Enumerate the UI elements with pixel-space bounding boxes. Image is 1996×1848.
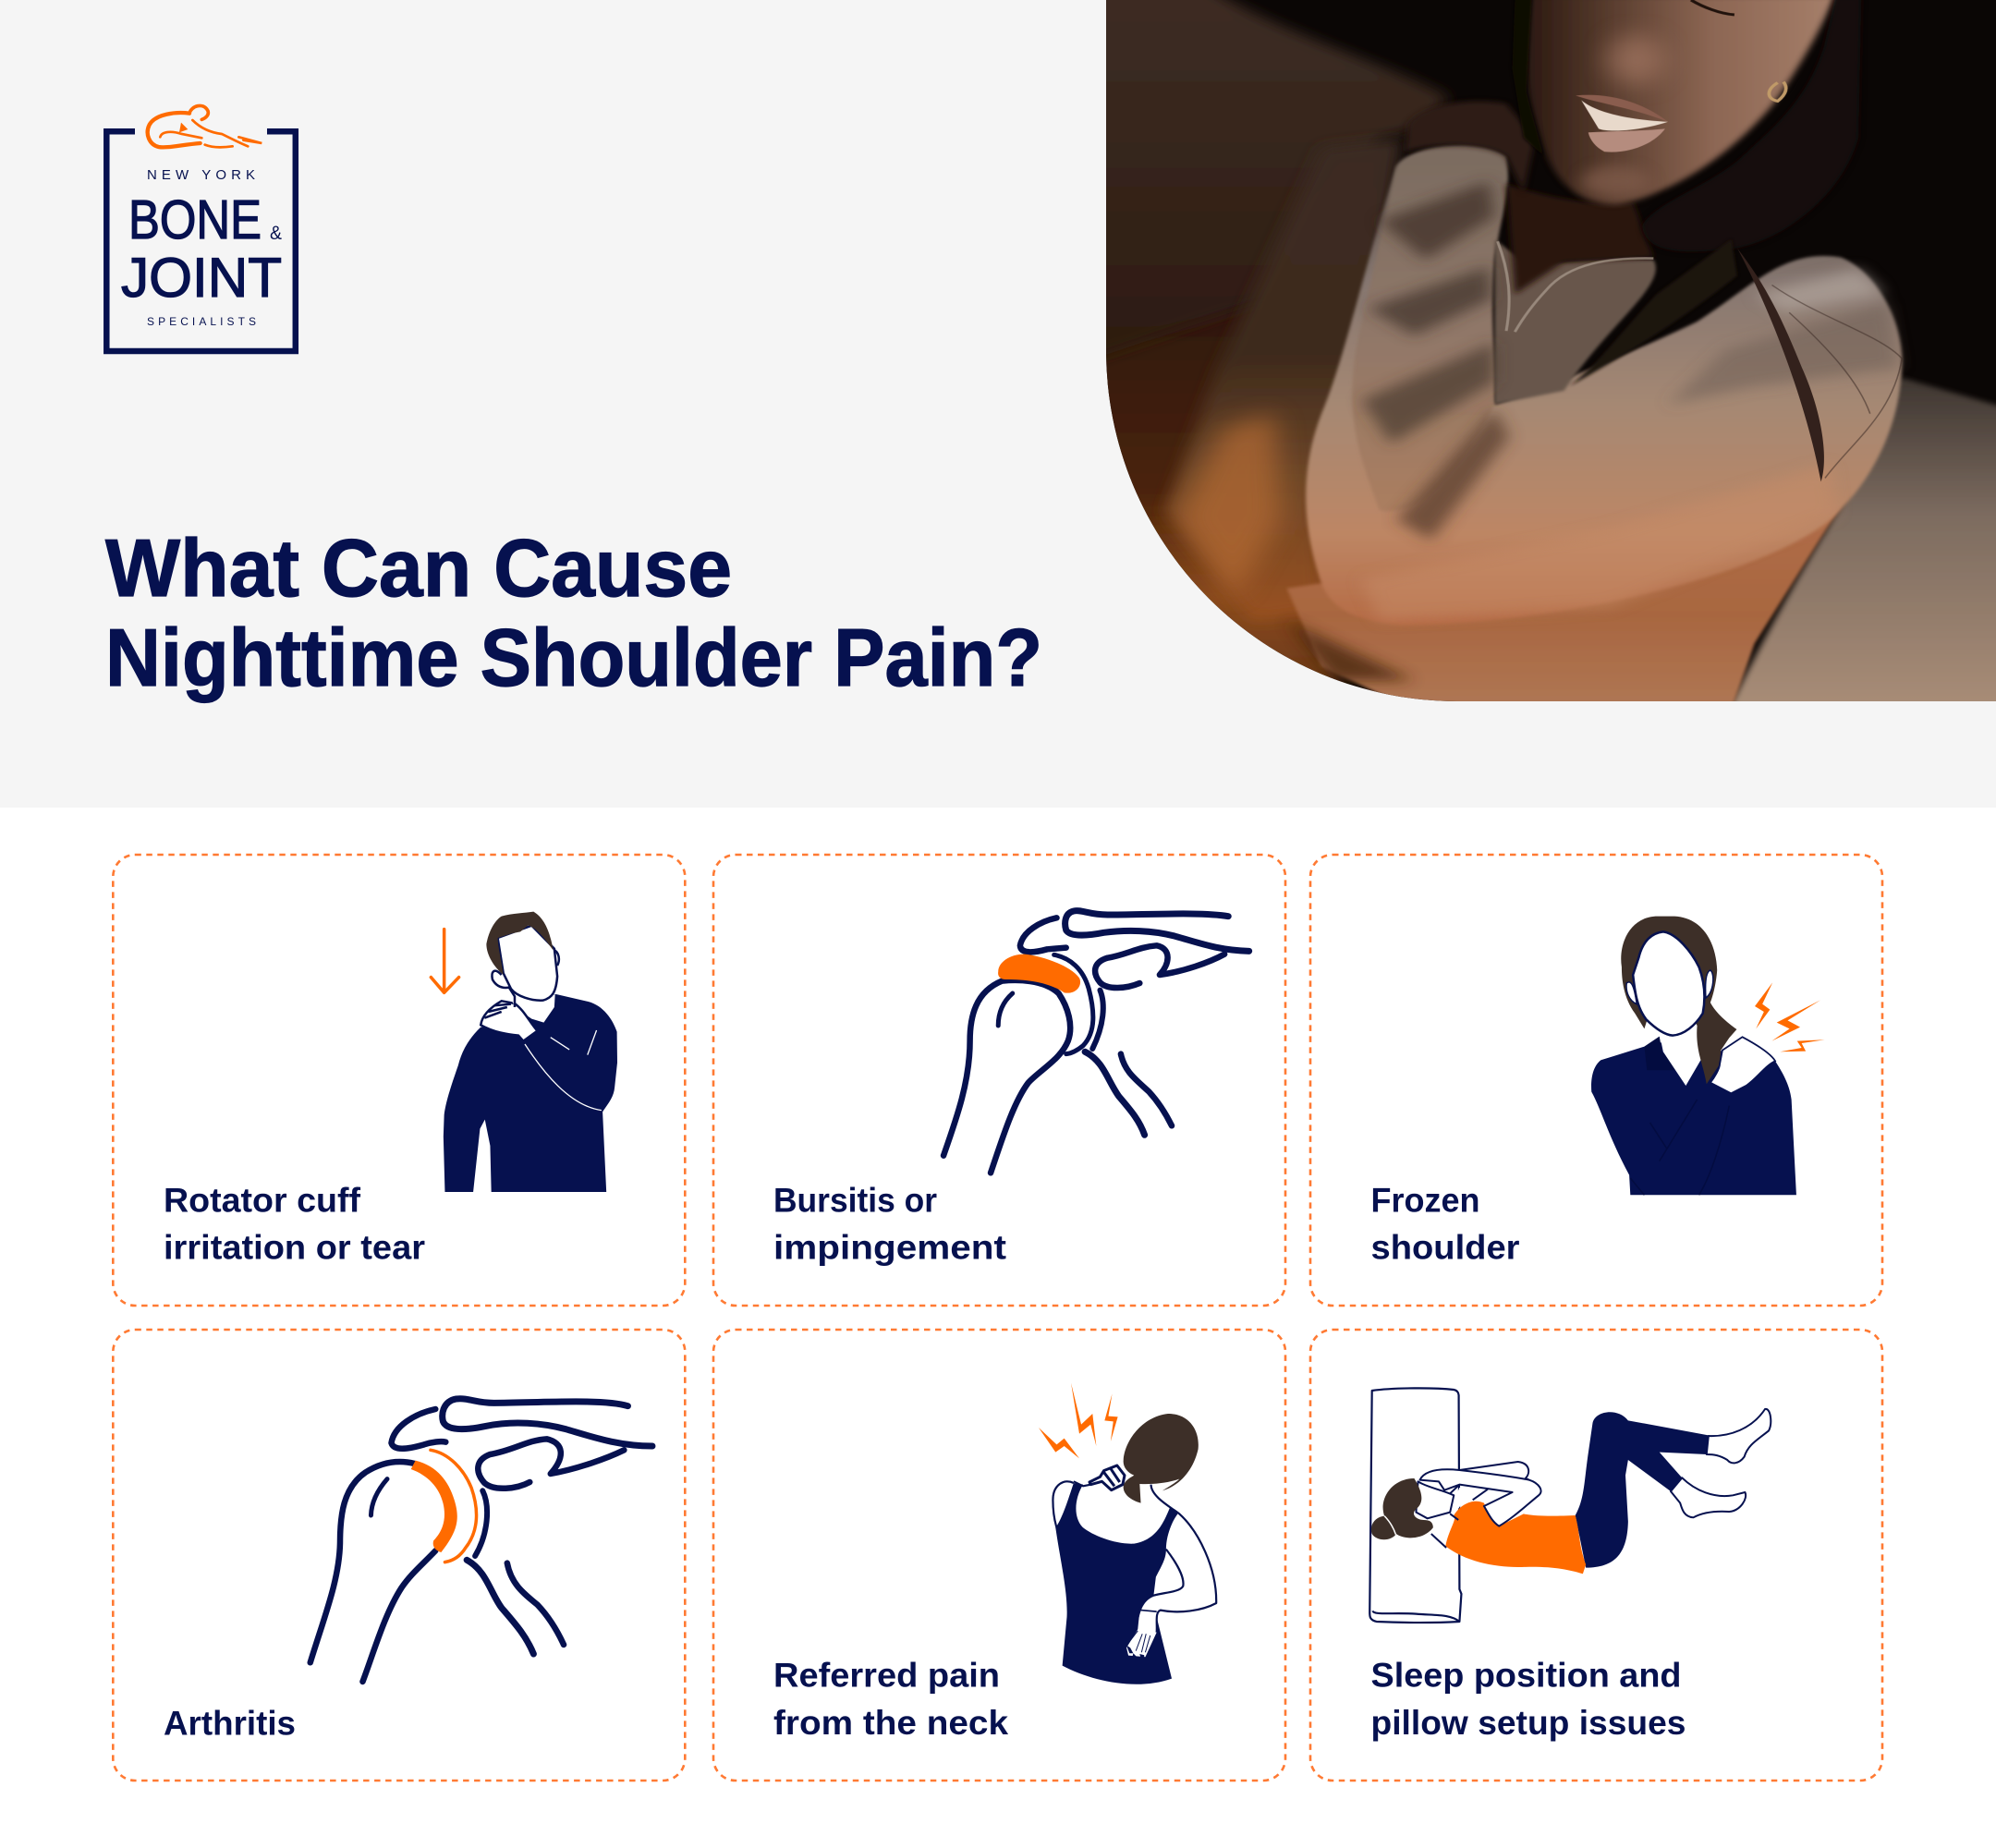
panel: arthritis (113, 1330, 685, 1781)
illustration: woman holding neck, seen from behind (1039, 1383, 1216, 1684)
pillow (1369, 1388, 1461, 1623)
logo wordmark: BONE (128, 189, 262, 250)
illustration: woman with shoulder pain (1591, 917, 1825, 1195)
icon: down arrow (431, 930, 459, 992)
label: Frozen (1371, 1181, 1480, 1220)
title: What Can Cause (105, 522, 732, 614)
label (1371, 1181, 1519, 1266)
panel: frozen shoulder (1310, 855, 1882, 1306)
photo: woman holding her shoulder in bed at night (1067, 0, 1996, 726)
logo wordmark: SPECIALISTS (147, 315, 256, 328)
icon: pain bolts (1039, 1383, 1118, 1458)
panel: rotator cuff (113, 855, 685, 1306)
label (773, 1181, 1006, 1266)
label: impingement (773, 1229, 1006, 1266)
sweater folds (1362, 182, 1899, 621)
panel: bursitis (713, 855, 1285, 1306)
illustration: woman lying on pillow (1369, 1388, 1771, 1623)
logo (106, 105, 296, 351)
hand on neck (1089, 1465, 1125, 1490)
header background panel (0, 0, 1996, 808)
label: irritation or tear (164, 1229, 425, 1266)
logo frame (106, 131, 296, 351)
panel: referred pain (713, 1330, 1285, 1781)
label: Rotator cuff (164, 1181, 361, 1220)
logo icon: reclining figure (148, 105, 262, 147)
label: Arthritis (164, 1704, 296, 1743)
logo wordmark: & (270, 223, 282, 244)
label: Sleep position and (1371, 1656, 1682, 1695)
illustration: man holding shoulder (431, 912, 617, 1192)
panel: sleep position (1310, 1330, 1882, 1781)
label (1371, 1656, 1686, 1742)
illustration: shoulder joint with bursa (943, 911, 1249, 1173)
title: Nighttime Shoulder Pain? (105, 612, 1042, 703)
logo wordmark (121, 167, 282, 328)
illustration: arthritic shoulder joint (310, 1399, 652, 1682)
label: from the neck (773, 1704, 1008, 1742)
label: Bursitis or (773, 1181, 937, 1220)
logo wordmark: NEW YORK (147, 167, 255, 183)
label (164, 1181, 425, 1266)
bursa highlight (998, 954, 1080, 993)
cartilage highlight (411, 1450, 477, 1562)
label: shoulder (1371, 1229, 1519, 1266)
label: pillow setup issues (1371, 1704, 1686, 1742)
logo wordmark: JOINT (121, 247, 282, 309)
icon: pain bolts (1755, 982, 1825, 1052)
label: Referred pain (773, 1656, 1000, 1695)
label (773, 1656, 1008, 1742)
title (105, 522, 1042, 703)
